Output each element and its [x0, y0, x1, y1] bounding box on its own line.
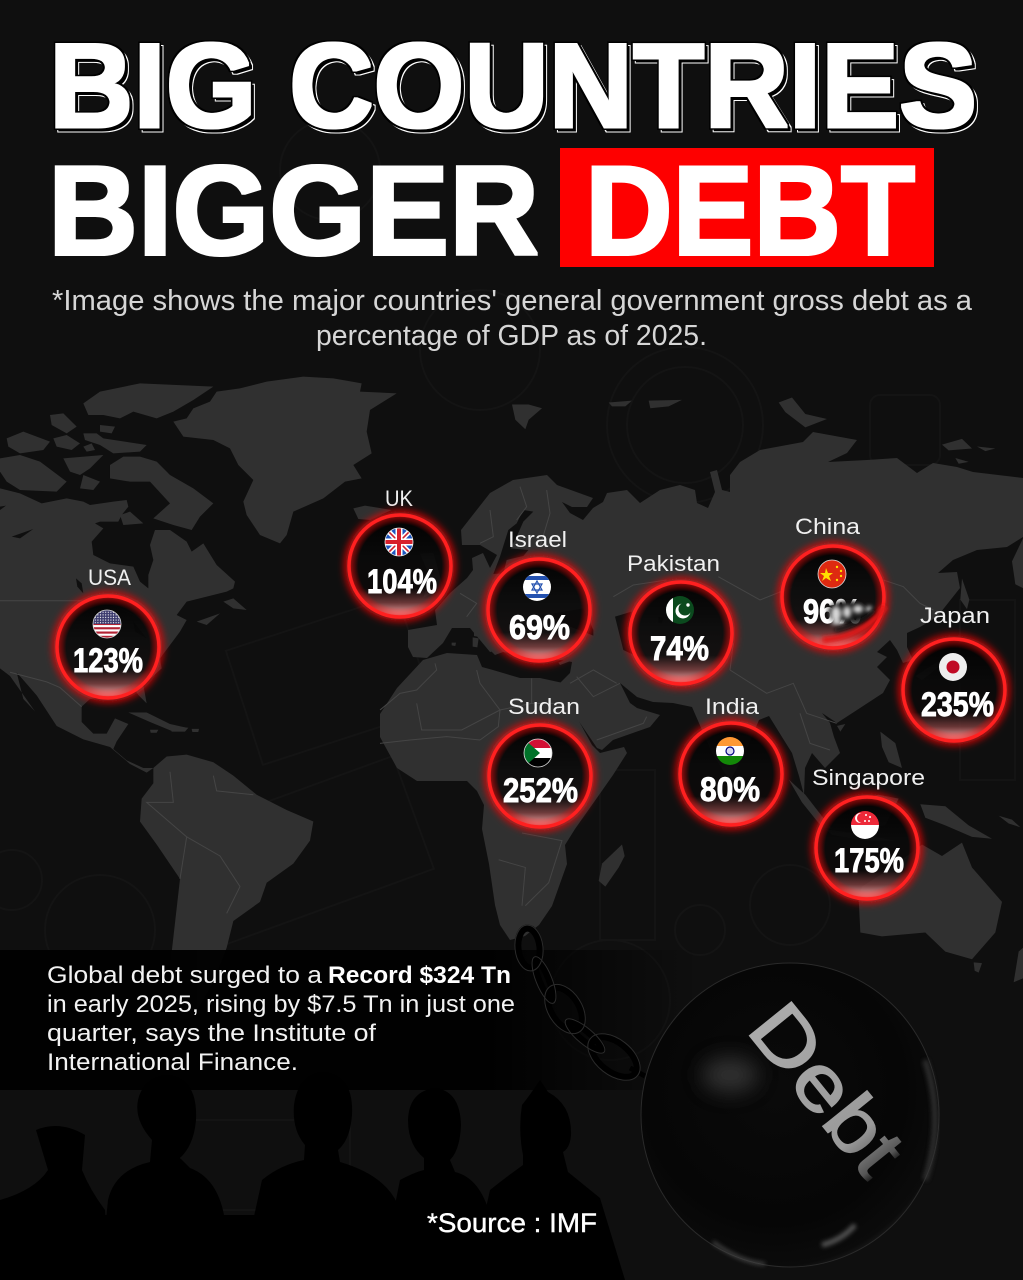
- callout: Singapore: Singapore: [812, 765, 925, 790]
- callout: Japan: Japan: [920, 603, 990, 628]
- body text: [47, 962, 515, 1076]
- callout: India: 80%: [700, 771, 760, 809]
- body text: quarter, says the Institute of: [47, 1020, 376, 1047]
- callout: Pakistan: [627, 551, 733, 685]
- flag: China: [818, 560, 846, 588]
- callout: India: [679, 694, 783, 826]
- subtitle: [52, 285, 973, 352]
- callout: USA: [56, 565, 160, 699]
- inland seas: [493, 510, 663, 655]
- callout: Israel: [487, 527, 591, 662]
- south america caribbean and uk: [128, 553, 443, 1021]
- flag: Israel: [523, 573, 551, 601]
- title highlight: debt: DEBT: [585, 140, 915, 282]
- flag: UK: [385, 528, 413, 556]
- callout: Singapore: 175%: [834, 842, 904, 880]
- body text: in early 2025, rising by $7.5 Tn in just one: [47, 991, 515, 1018]
- body text: Global debt surged to a: [47, 962, 323, 989]
- eurasia: [408, 432, 1023, 795]
- callout: USA: 123%: [73, 642, 143, 680]
- callout: China: 96%: [803, 593, 861, 631]
- callout: China: [781, 514, 885, 649]
- flag: India: [716, 737, 744, 765]
- title line 2: bigger: BIGGER: [48, 140, 539, 282]
- wrecking ball: [641, 963, 939, 1267]
- callout: China: China: [795, 514, 861, 539]
- africa: [380, 653, 627, 940]
- source note: *Source : IMF: [427, 1208, 597, 1238]
- body text: Record $324 Tn: [328, 962, 511, 989]
- callout: Sudan: Sudan: [508, 694, 580, 719]
- text panel backdrop: [0, 950, 700, 1090]
- ball label: Debt: [732, 985, 923, 1193]
- world map: [0, 377, 1023, 1021]
- callout: Pakistan: Pakistan: [627, 551, 720, 576]
- body text: International Finance.: [47, 1049, 298, 1076]
- silhouettes of people: [0, 1072, 625, 1280]
- flag: Singapore: [851, 811, 879, 839]
- callout: Sudan: 252%: [503, 772, 578, 810]
- country borders: [0, 601, 253, 913]
- callout: Pakistan: 74%: [650, 630, 709, 668]
- callout: UK: [348, 486, 452, 618]
- callout: Japan: 235%: [921, 686, 994, 724]
- callout: UK: 104%: [367, 563, 437, 601]
- title line 1: BIG COUNTRIES: [49, 19, 977, 153]
- smudge over value: [822, 601, 885, 640]
- callout: UK: UK: [385, 486, 413, 511]
- callout: Israel: Israel: [508, 527, 567, 552]
- flag: Pakistan: [666, 596, 694, 624]
- callout: Sudan: [488, 694, 592, 828]
- chain: [513, 924, 649, 1090]
- callout: USA: USA: [88, 565, 131, 590]
- flag: Japan: [939, 653, 967, 681]
- subtitle: percentage of GDP as of 2025.: [316, 320, 707, 352]
- arctic asia islands and oceania: [512, 398, 1023, 982]
- callout: Singapore: [812, 765, 925, 900]
- north america and greenland: [0, 377, 397, 773]
- callout: Japan: [902, 603, 1006, 742]
- callout: Israel: 69%: [509, 609, 570, 647]
- subtitle: *Image shows the major countries' general government gross debt as a: [52, 285, 973, 317]
- flag: Sudan: [524, 739, 552, 767]
- lakes: [0, 506, 147, 638]
- flag: USA: [93, 610, 121, 638]
- callout: India: India: [705, 694, 760, 719]
